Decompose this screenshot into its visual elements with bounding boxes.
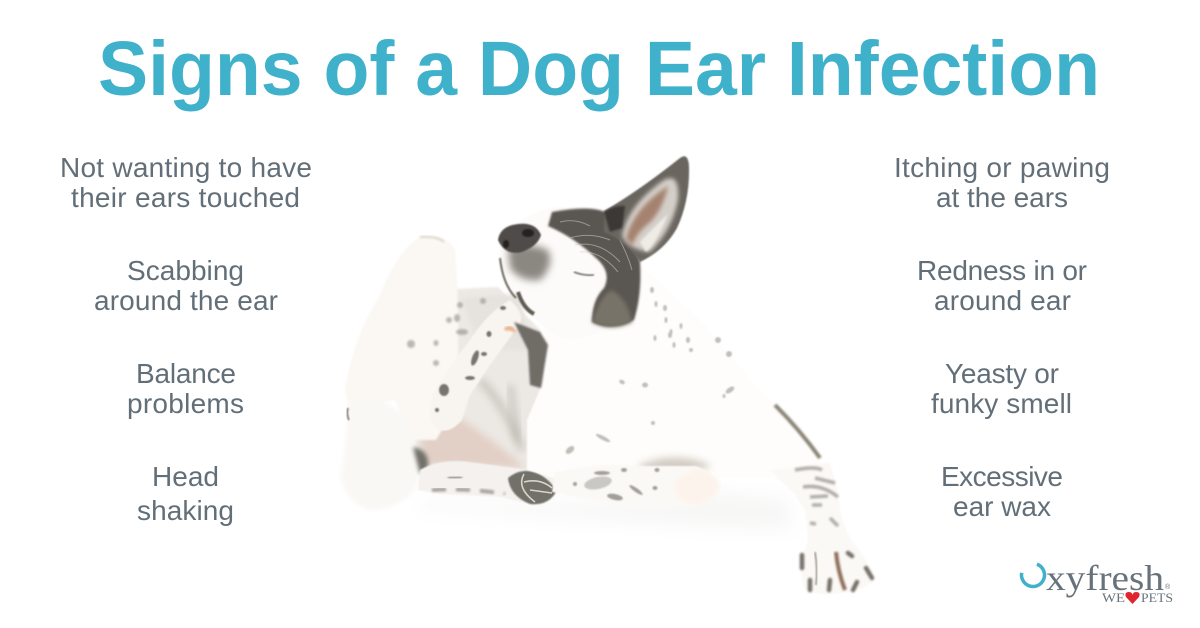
sign: balance problems (127, 358, 244, 419)
left column of signs (60, 152, 312, 526)
sign: yeasty smell (931, 358, 1072, 419)
sign: scabbing: Scabbing (127, 255, 244, 286)
sign: head shaking: Head (152, 461, 219, 492)
sign: itching or pawing: Itching or pawing (894, 152, 1110, 183)
sign: scabbing: around the ear (94, 285, 278, 316)
nose (498, 224, 541, 253)
sign: redness: around ear (934, 285, 1071, 316)
dark face patch (548, 208, 640, 327)
belly and hind body (400, 287, 548, 470)
right column of signs (894, 152, 1110, 522)
sign: redness: Redness in or (917, 255, 1087, 286)
logo wordmark: xyfresh (1046, 558, 1164, 598)
sign: scabbing (94, 255, 278, 316)
sign: not wanting ears touched (60, 152, 312, 213)
sign: balance problems: problems (127, 388, 244, 419)
bushy tail (341, 395, 419, 510)
title: Signs of a Dog Ear Infection (98, 26, 1100, 112)
head (500, 207, 641, 339)
sign: yeasty smell: funky smell (931, 388, 1072, 419)
jaw dark edge (500, 258, 516, 298)
torso (527, 262, 836, 490)
logo ring O (1018, 560, 1048, 590)
sign: head shaking: shaking (137, 495, 234, 526)
front leg (extended) with paw (770, 462, 873, 594)
logo heart (1125, 592, 1140, 604)
dark shoulder stripe (775, 405, 820, 458)
sign: ear wax: Excessive (941, 461, 1063, 492)
sign: head shaking (137, 461, 234, 526)
sign: redness (917, 255, 1087, 316)
eye and whisker lines (560, 215, 632, 272)
ground shadow (420, 492, 790, 530)
sign: itching or pawing: at the ears (936, 182, 1068, 213)
logo: Oxyfresh We Love Pets (1018, 558, 1173, 605)
sign: not wanting ears touched: their ears touched (71, 182, 300, 213)
sign: balance problems: Balance (136, 358, 236, 389)
logo registered mark: ® (1165, 583, 1171, 591)
sign: yeasty smell: Yeasty or (945, 358, 1059, 389)
lower hind leg with paw pads (418, 461, 555, 504)
extended paw toes (802, 553, 872, 590)
sign: ear wax: ear wax (953, 491, 1051, 522)
sign: itching or pawing (894, 152, 1110, 213)
scratching hind paw (430, 300, 521, 431)
hind leg spots (407, 298, 486, 366)
logo tagline: WE (1102, 590, 1125, 605)
dog photo illustration (341, 156, 873, 594)
raised hind leg (345, 237, 460, 440)
torso spots (564, 287, 736, 456)
ear (604, 156, 689, 262)
logo tagline pets: PETS (1141, 590, 1173, 605)
sign: not wanting ears touched: Not wanting to have (60, 152, 312, 183)
front leg (horizontal) (552, 465, 720, 510)
muzzle shading (508, 245, 550, 280)
sign: ear wax (941, 461, 1063, 522)
